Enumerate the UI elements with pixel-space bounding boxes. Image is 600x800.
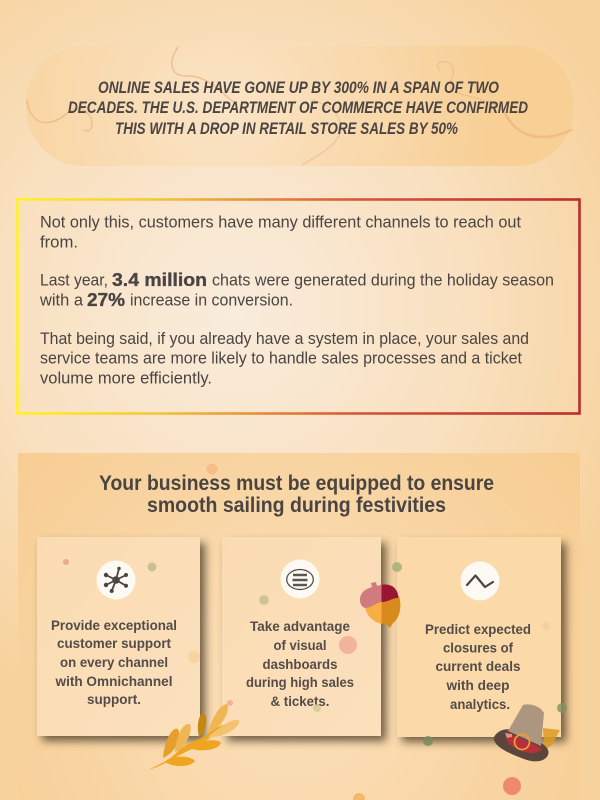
card 2 text: & tickets. xyxy=(270,693,330,709)
headline text: ONLINE SALES HAVE GONE UP BY 300% IN A SPAN OF TWO xyxy=(98,79,499,97)
paragraph: holiday chats statistics: with a xyxy=(39,290,84,310)
card 1 text xyxy=(51,617,177,707)
paragraph: channels: from. xyxy=(40,232,78,252)
icon: autumn leaf branch xyxy=(148,704,239,770)
card 3: predictive analytics xyxy=(397,537,566,742)
card 2 text: Take advantage xyxy=(250,618,350,634)
decorative swirls xyxy=(27,47,571,165)
icon: trend line xyxy=(460,562,500,600)
card 1 text: on every channel xyxy=(60,654,168,670)
card 3 text: analytics. xyxy=(450,696,510,712)
card 3 text: current deals xyxy=(436,658,521,674)
card 1 text: customer support xyxy=(57,635,171,651)
paragraph: system in place xyxy=(40,329,529,388)
card 2 text xyxy=(246,618,354,709)
paragraph: channels xyxy=(40,212,521,252)
paragraph: holiday chats statistics: 27% xyxy=(87,289,125,310)
panel: statistics text box xyxy=(18,200,580,414)
panel: festivities section xyxy=(18,453,580,800)
decorative confetti dots xyxy=(188,562,567,800)
card 1: omnichannel support xyxy=(37,537,205,741)
paragraph: system in place: volume more efficiently. xyxy=(40,368,212,388)
paragraph: system in place: service teams are more likely to handle sales processes and a ticket xyxy=(40,348,522,368)
card 2: visual dashboards xyxy=(222,537,386,741)
card 2 text: dashboards xyxy=(262,656,338,672)
icon: dashboard lines xyxy=(280,560,320,598)
card 1 text: with Omnichannel xyxy=(55,673,172,689)
card 3 text xyxy=(425,621,531,712)
paragraph: holiday chats statistics: chats were generated during the holiday season xyxy=(212,270,554,290)
card 1 text: Provide exceptional xyxy=(51,617,177,633)
panel: headline pill xyxy=(26,46,574,166)
paragraph: holiday chats statistics xyxy=(39,269,554,310)
paragraph: holiday chats statistics: 3.4 million xyxy=(112,269,207,290)
paragraph: holiday chats statistics: increase in conversion. xyxy=(130,290,293,310)
card 3 text: with deep xyxy=(446,677,510,693)
icon: network hub xyxy=(96,560,136,600)
icon: acorn xyxy=(360,582,400,628)
icon: pilgrim hat xyxy=(494,704,560,761)
headline text xyxy=(68,79,528,138)
card 3 text: Predict expected xyxy=(425,621,531,637)
section heading: Your business must be equipped to ensure xyxy=(99,472,494,495)
card 3 text: closures of xyxy=(443,640,513,656)
section heading: smooth sailing during festivities xyxy=(147,494,446,517)
card 2 text: during high sales xyxy=(246,674,354,690)
paragraph: channels: Not only this, customers have many different channels to reach out xyxy=(40,212,521,232)
card 1 text: support. xyxy=(87,691,141,707)
headline text: THIS WITH A DROP IN RETAIL STORE SALES BY 50% xyxy=(115,120,458,138)
section heading xyxy=(99,464,494,517)
paragraph: holiday chats statistics: Last year, xyxy=(40,270,108,290)
card 2 text: of visual xyxy=(274,637,326,653)
paragraph: system in place: That being said, if you already have a system in place, your sales and xyxy=(40,329,529,348)
